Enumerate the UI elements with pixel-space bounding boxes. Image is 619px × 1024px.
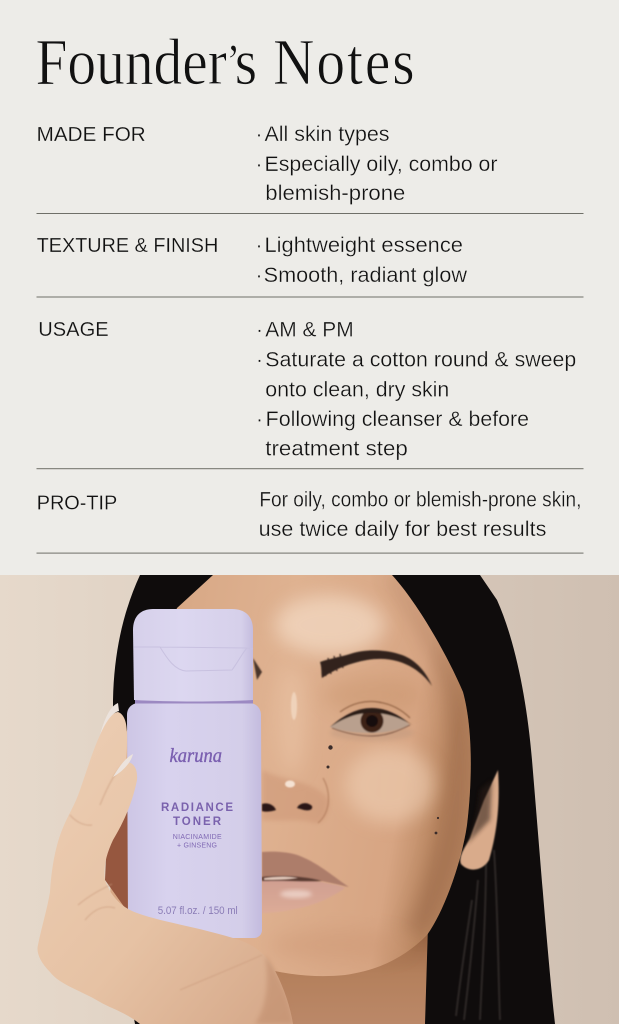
label: texture and finish: TEXTURE & FINISH (37, 234, 218, 257)
shadow between hand and bottle (105, 812, 128, 909)
hair highlights (456, 850, 500, 1020)
nose (262, 692, 329, 823)
label: made for: MADE FOR (37, 123, 146, 146)
text: texture list: · (256, 264, 262, 287)
text: usage list: treatment step (265, 438, 408, 460)
text: texture list: Lightweight essence (264, 234, 463, 257)
face shading and highlights (270, 575, 471, 961)
hand (38, 703, 293, 1024)
moles (326, 745, 439, 834)
hand shading (257, 959, 292, 1024)
text: usage list: · (256, 318, 263, 342)
product name: TONER (173, 816, 222, 828)
product: toner bottle (127, 609, 262, 938)
text: made for list: blemish-prone (265, 182, 405, 205)
product ingredients (173, 834, 222, 848)
text: made for list: All skin types (264, 123, 390, 146)
label: usage: USAGE (38, 318, 109, 341)
lips (262, 852, 349, 913)
text: usage list: Saturate a cotton round & sweep (265, 348, 576, 372)
text: pro-tip body: For oily, combo or blemish-prone skin, (259, 488, 581, 512)
row: pro-tip (37, 488, 581, 541)
product ingredients: + GINSENG (177, 842, 217, 850)
panel: founder's notes background (0, 0, 619, 575)
title: s (235, 26, 271, 99)
text: pro-tip body (259, 488, 581, 541)
text: usage list (256, 318, 576, 460)
eye (330, 701, 414, 741)
title: Notes (273, 26, 417, 99)
neck (275, 934, 428, 1024)
text: usage list: onto clean, dry skin (265, 378, 449, 402)
hair (113, 575, 555, 1024)
product name (162, 802, 233, 825)
row: usage (38, 318, 576, 460)
text: made for list: · (256, 123, 262, 146)
row: texture and finish (37, 234, 468, 287)
product name: RADIANCE (161, 802, 233, 814)
cap seam and thumb tab (134, 647, 253, 671)
text: made for list: Especially oily, combo or (264, 153, 498, 176)
hand creases (70, 772, 227, 990)
row: made for (37, 123, 497, 205)
label: pro-tip: PRO-TIP (37, 492, 117, 514)
text: usage list: Following cleanser & before (266, 408, 529, 431)
brand logo: karuna (170, 745, 222, 767)
bottle neck shadow (135, 700, 253, 704)
text: made for list: · (256, 153, 262, 176)
text: texture list: Smooth, radiant glow (264, 264, 468, 287)
ear (460, 770, 499, 870)
text: made for list (256, 123, 498, 205)
text: texture list (256, 234, 468, 287)
text: usage list: · (256, 348, 263, 372)
bottle body (127, 703, 262, 938)
text: texture list: · (256, 234, 262, 257)
title: Founder (36, 26, 227, 99)
text: usage list: · (256, 408, 263, 431)
fingernails (100, 703, 133, 777)
product volume: 5.07 fl.oz. / 150 ml (158, 905, 238, 917)
eyebrow (253, 650, 432, 686)
text: pro-tip body: use twice daily for best results (259, 518, 546, 541)
photo: model holding toner bottle (0, 575, 619, 1024)
face (110, 575, 471, 976)
text: usage list: AM & PM (265, 318, 354, 342)
title: ’ (226, 34, 241, 90)
product ingredients: NIACINAMIDE (173, 834, 222, 841)
bottle cap (133, 609, 253, 702)
